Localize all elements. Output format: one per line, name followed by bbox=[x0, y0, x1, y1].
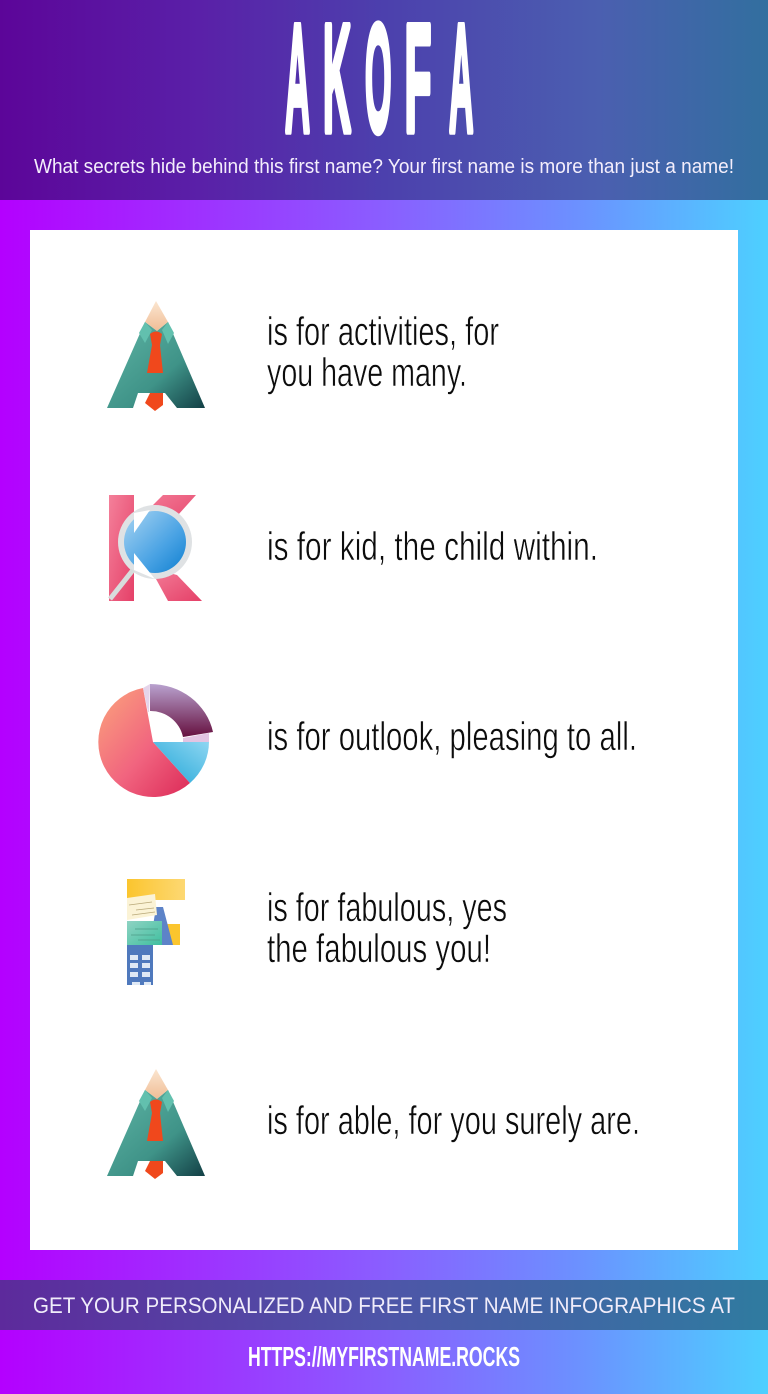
text: activities: is for activities, for bbox=[267, 310, 499, 354]
text: fabulous: is for fabulous, yes bbox=[267, 886, 507, 930]
white content panel bbox=[30, 230, 738, 1250]
icon: letter O pie chart bbox=[98, 684, 213, 797]
text: fabulous: the fabulous you! bbox=[267, 927, 491, 971]
header band bbox=[0, 0, 768, 200]
subtitle: What secrets hide behind this first name? Your first name is more than just a name! bbox=[34, 156, 734, 178]
text: outlook: is for outlook, pleasing to all. bbox=[267, 715, 637, 759]
url: HTTPS://MYFIRSTNAME.ROCKS bbox=[248, 1341, 520, 1372]
row A: able bbox=[107, 1069, 640, 1179]
row A: activities bbox=[107, 301, 499, 411]
icon: letter A with tie bbox=[107, 301, 205, 411]
row F: fabulous bbox=[127, 879, 507, 985]
footer text: GET YOUR PERSONALIZED AND FREE FIRST NAME INFOGRAPHICS AT bbox=[33, 1293, 735, 1318]
text: activities: you have many. bbox=[267, 351, 467, 395]
icon: letter F with documents bbox=[127, 879, 185, 985]
row K: kid bbox=[109, 495, 598, 601]
text: able: is for able, for you surely are. bbox=[267, 1099, 640, 1143]
footer band bbox=[0, 1280, 768, 1330]
icon: letter K with magnifier bbox=[109, 495, 202, 601]
text: kid: is for kid, the child within. bbox=[267, 525, 598, 569]
icon: letter A with tie bbox=[107, 1069, 205, 1179]
row O: outlook bbox=[98, 684, 637, 797]
